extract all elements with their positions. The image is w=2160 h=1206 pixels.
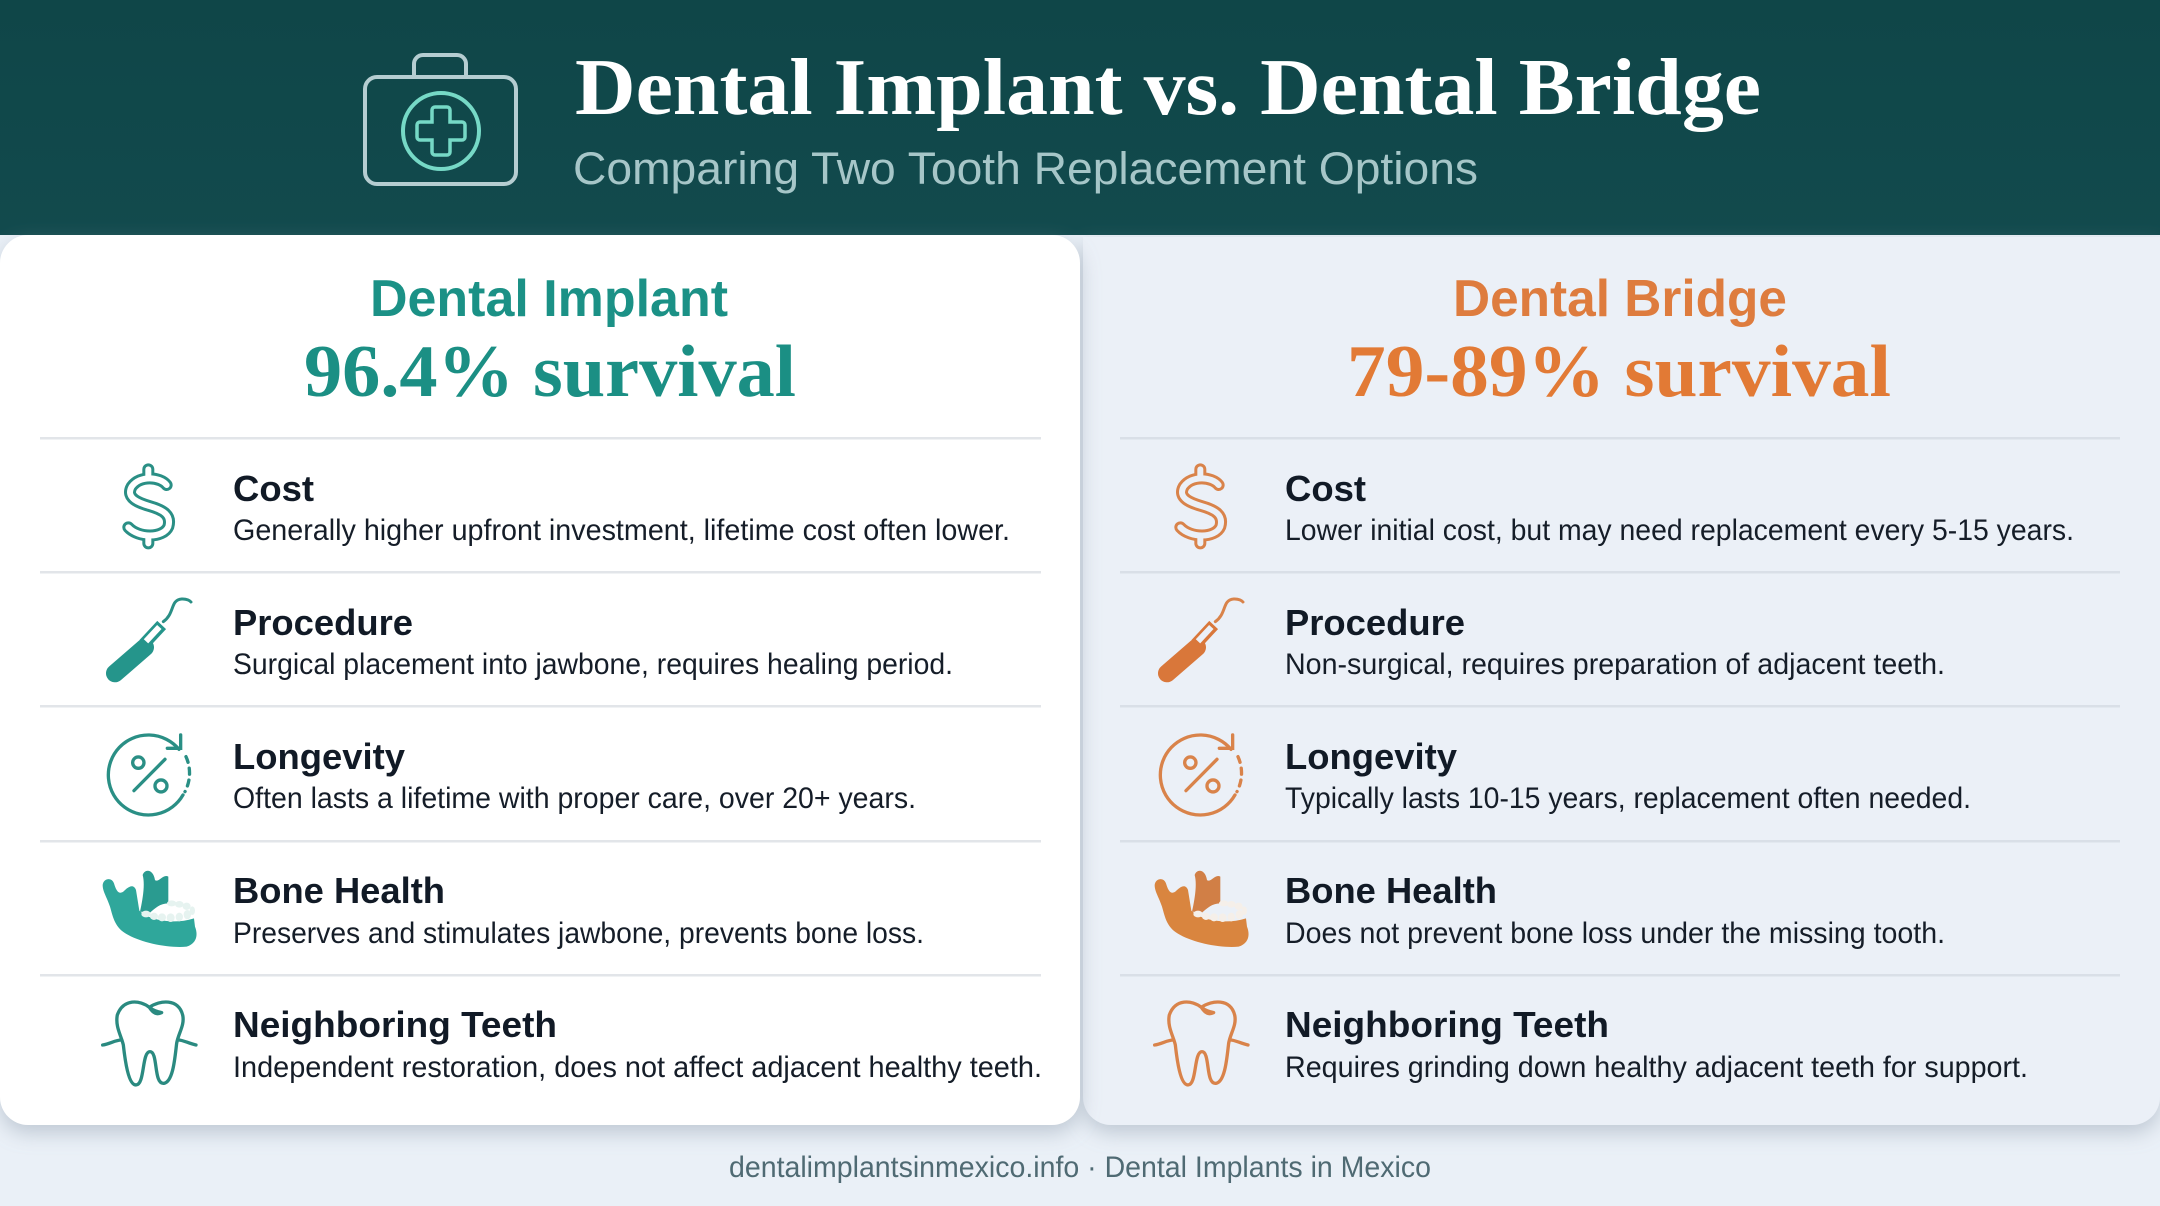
footer source line: dentalimplantsinmexico.info · Dental Implants in Mexico [729, 1151, 1431, 1184]
header banner [0, 0, 2160, 235]
row: implant bone health [103, 870, 924, 950]
implant heading: Dental Implant [370, 270, 728, 328]
icon: jawbone [103, 871, 197, 947]
icon: percent cycle [1160, 735, 1242, 815]
longevity text: Often lasts a lifetime with proper care, over 20+ years. [233, 782, 916, 815]
bone health text: Does not prevent bone loss under the missing tooth. [1285, 917, 1945, 950]
bridge heading: Dental Bridge [1453, 270, 1787, 328]
row: bridge cost [1180, 468, 2074, 547]
bridge survival rate: 79-89% survival [1347, 331, 1891, 413]
bone health label: Bone Health [1285, 870, 1497, 911]
title: Dental Implant vs. Dental Bridge [575, 44, 1761, 132]
procedure text: Non-surgical, requires preparation of adjacent teeth. [1285, 648, 1945, 681]
icon: tooth [103, 1002, 196, 1085]
icon: dollar [1180, 469, 1221, 543]
icon: tooth [1155, 1002, 1248, 1085]
row: implant cost [128, 468, 1010, 547]
icon: dental probe [115, 599, 191, 673]
row: implant neighboring teeth [103, 1002, 1042, 1085]
icon: jawbone [1155, 871, 1249, 947]
procedure text: Surgical placement into jawbone, requires healing period. [233, 648, 953, 681]
neighboring teeth text: Independent restoration, does not affect adjacent healthy teeth. [233, 1051, 1042, 1084]
row: implant procedure [115, 599, 953, 681]
neighboring teeth text: Requires grinding down healthy adjacent teeth for support. [1285, 1051, 2028, 1084]
procedure label: Procedure [233, 602, 413, 643]
cost text: Lower initial cost, but may need replacement every 5-15 years. [1285, 514, 2074, 547]
row: implant longevity [108, 735, 916, 815]
bone health label: Bone Health [233, 870, 445, 911]
neighboring teeth label: Neighboring Teeth [1285, 1004, 1609, 1045]
row: bridge neighboring teeth [1155, 1002, 2028, 1085]
row: bridge bone health [1155, 870, 1945, 950]
icon: percent cycle [108, 735, 190, 815]
subtitle: Comparing Two Tooth Replacement Options [573, 143, 1478, 194]
cost text: Generally higher upfront investment, lifetime cost often lower. [233, 514, 1010, 547]
procedure label: Procedure [1285, 602, 1465, 643]
bone health text: Preserves and stimulates jawbone, prevents bone loss. [233, 917, 924, 950]
panel: dental implant [0, 235, 1080, 1125]
cost label: Cost [1285, 468, 1366, 509]
icon: medical kit [365, 55, 516, 184]
neighboring teeth label: Neighboring Teeth [233, 1004, 557, 1045]
implant survival rate: 96.4% survival [304, 331, 796, 413]
panel: dental bridge [1083, 237, 2160, 1125]
icon: dollar [128, 469, 169, 543]
longevity label: Longevity [233, 736, 405, 777]
row: bridge longevity [1160, 735, 1971, 815]
icon: dental probe [1167, 599, 1243, 673]
longevity label: Longevity [1285, 736, 1457, 777]
cost label: Cost [233, 468, 314, 509]
longevity text: Typically lasts 10-15 years, replacement often needed. [1285, 782, 1971, 815]
row: bridge procedure [1167, 599, 1945, 681]
